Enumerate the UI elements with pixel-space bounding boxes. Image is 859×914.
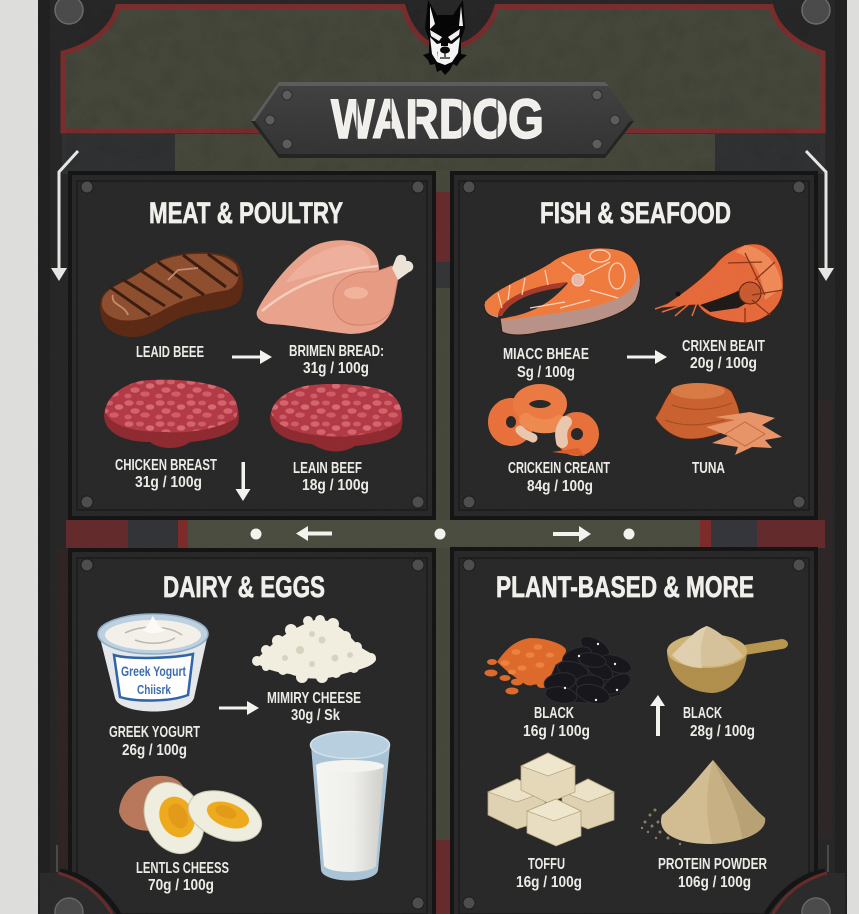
panel: meat and poultry: [68, 171, 436, 520]
label: protein powder: [658, 856, 767, 891]
heading: FISH & SEAFOOD: [540, 197, 731, 230]
corner bracket: bottom right: [766, 845, 845, 914]
label: leain beef: 18g / 100g: [302, 477, 369, 494]
label: crixen beait: 20g / 100g: [690, 355, 757, 372]
icon: peeled shrimp cluster: [497, 392, 591, 456]
icon: raw whole chicken: [257, 240, 413, 334]
panel: plant based and more: [450, 547, 818, 914]
label: mimiry cheese: MIMIRY CHEESE: [267, 690, 361, 707]
corner rivet: top right: [802, 0, 830, 24]
label: miacc bheae: MIACC BHEAE: [503, 346, 589, 363]
label: toffu: 16g / 100g: [516, 874, 582, 891]
label: brimen bread: BRIMEN BREAD:: [289, 343, 384, 360]
label: black: BLACK: [534, 705, 575, 722]
label: black second: 28g / 100g: [690, 723, 755, 740]
label: mimiry cheese: 30g / Sk: [291, 707, 340, 724]
label: leain beef: [293, 460, 369, 494]
icon: tuna chunk and flakes: [655, 383, 782, 455]
label: crickein creant: [508, 460, 610, 495]
arrow: up: [650, 695, 665, 736]
corner rivet: top left: [55, 0, 83, 24]
label: greek yogurt: GREEK YOGURT: [109, 724, 200, 741]
icon: ground beef patty right: [270, 384, 402, 452]
arrow: right: [627, 350, 667, 364]
label: black: 16g / 100g: [523, 723, 590, 740]
arrow: right: [219, 701, 259, 715]
label: protein powder: PROTEIN POWDER: [658, 856, 767, 873]
label: toffu: TOFFU: [528, 856, 565, 873]
icon: greek yogurt tub: [98, 614, 208, 712]
heading: DAIRY & EGGS: [163, 571, 325, 604]
icon: whole shrimp: [655, 244, 783, 323]
label: chicken breast: 31g / 100g: [135, 474, 202, 491]
icon: lentils and black beans: [484, 632, 634, 707]
label: leain beef: LEAIN BEEF: [293, 460, 362, 477]
icon: salmon steak: [484, 248, 640, 335]
arrow: right side long: [806, 151, 834, 281]
label: black second: BLACK: [683, 705, 723, 722]
label: leaid beee: LEAID BEEE: [136, 344, 204, 361]
label: black second: [683, 705, 755, 740]
icon: protein powder pile: [641, 760, 765, 845]
heading: MEAT & POULTRY: [149, 197, 343, 230]
icon: grilled steak: [100, 252, 243, 337]
label: black: [523, 705, 590, 740]
panel: fish and seafood: [450, 171, 818, 520]
icon: wardog head logo: [423, 0, 467, 75]
icon: ground beef patty left: [104, 380, 239, 448]
label: chicken breast: [115, 457, 217, 491]
label: crixen beait: CRIXEN BEAIT: [682, 338, 765, 355]
corner bracket: bottom left: [40, 845, 119, 914]
label: crixen beait: [682, 338, 765, 372]
icon: boiled eggs: [119, 773, 269, 863]
label: protein powder: 106g / 100g: [678, 874, 751, 891]
label: brimen bread: [289, 343, 384, 377]
arrow: right: [232, 350, 272, 364]
icon: tofu cubes: [488, 753, 614, 846]
label: miacc bheae: [503, 346, 589, 381]
heading: PLANT-BASED & MORE: [496, 571, 754, 604]
label: lentls cheess: [136, 860, 229, 894]
yogurt tub label text: [121, 663, 186, 697]
label: greek yogurt: 26g / 100g: [122, 742, 187, 759]
icon: cottage cheese pile: [252, 615, 376, 683]
title: WARDOG: [331, 87, 544, 150]
panel: dairy and eggs: [68, 548, 436, 914]
yogurt tub label text: Greek Yogurt: [121, 663, 186, 679]
label: chicken breast: CHICKEN BREAST: [115, 457, 217, 474]
arrow: left side long: [51, 151, 78, 281]
label: lentls cheess: LENTLS CHEESS: [136, 860, 229, 877]
icon: glass of milk: [310, 732, 390, 880]
yogurt tub label text: Chiisrk: [137, 683, 171, 697]
label: greek yogurt: [109, 724, 200, 759]
label: miacc bheae: Sg / 100g: [517, 364, 575, 381]
connector dots and arrows: [250, 526, 634, 542]
label: tuna: TUNA: [692, 460, 725, 477]
texture overlay: worn header: [66, 10, 820, 170]
olive header panel with red border: [63, 6, 823, 131]
label: brimen bread: 31g / 100g: [303, 360, 369, 377]
label: lentls cheess: 70g / 100g: [148, 877, 214, 894]
label: crickein creant: 84g / 100g: [527, 478, 593, 495]
label: toffu: [516, 856, 582, 891]
label: crickein creant: CRICKEIN CREANT: [508, 460, 610, 477]
icon: scoop of protein powder: [667, 626, 788, 693]
arrow: down: [236, 462, 250, 501]
label: mimiry cheese: [267, 690, 361, 724]
stencil gaps in title: [357, 96, 497, 141]
banner plate: [251, 82, 634, 158]
